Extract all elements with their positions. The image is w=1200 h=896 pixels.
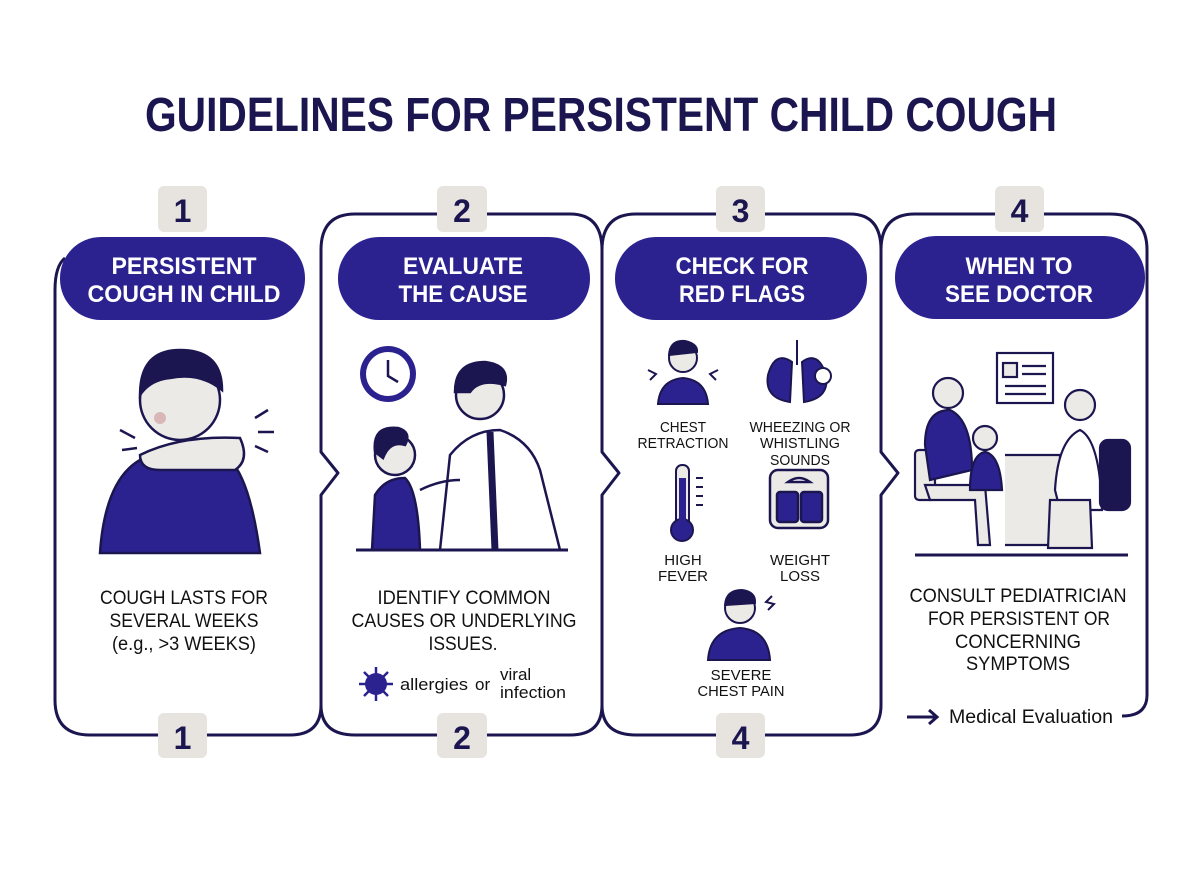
badge 1 bottom: 1: [174, 720, 191, 756]
badge 2 top: [437, 186, 487, 232]
text: chest retraction: CHEST: [660, 419, 706, 436]
text: wheezing: WHISTLING: [760, 435, 840, 452]
badge 3 top: 3: [732, 193, 749, 229]
panel: step 4: [895, 186, 1145, 728]
text: step 4 description: SYMPTOMS: [966, 654, 1070, 675]
icon: virus with causes: allergies: [400, 675, 468, 694]
text: step 2 description: CAUSES OR UNDERLYING: [352, 611, 576, 632]
header pill 1: COUGH IN CHILD: [88, 281, 280, 308]
badge 4 bottom: 4: [732, 720, 750, 756]
header pill 4: SEE DOCTOR: [945, 281, 1093, 308]
header pill 1: PERSISTENT: [112, 253, 257, 280]
header pill 3: [615, 237, 867, 320]
icon: virus with causes: or: [475, 675, 490, 694]
text: step 4 description: CONSULT PEDIATRICIAN: [910, 586, 1126, 607]
badge 4 top: 4: [1011, 193, 1029, 229]
text: step 1 description: COUGH LASTS FOR: [100, 588, 268, 609]
text: step 1 description: SEVERAL WEEKS: [110, 611, 258, 632]
text: severe chest pain: [698, 667, 784, 700]
panel outlines: [55, 214, 1147, 735]
text: step 4 description: FOR PERSISTENT OR: [928, 609, 1110, 630]
icon: virus with causes: infection: [500, 683, 566, 702]
text: weight loss: [770, 552, 830, 585]
icon: doctor examining child: [356, 362, 568, 550]
icon: chest retraction: [648, 341, 718, 404]
text: wheezing: SOUNDS: [770, 452, 830, 469]
badge 4 bottom: [716, 713, 765, 758]
text: chest retraction: RETRACTION: [638, 435, 728, 452]
header pill 4: [895, 236, 1145, 319]
header pill 2: THE CAUSE: [398, 281, 528, 308]
text: weight loss: WEIGHT: [770, 552, 830, 569]
icon: doctor consultation scene: [915, 353, 1130, 555]
text: step 4 description: CONCERNING: [955, 632, 1081, 653]
header pill 3: CHECK FOR: [676, 253, 808, 280]
title: GUIDELINES FOR PERSISTENT CHILD COUGH: [145, 89, 1057, 142]
icon: thermometer: [671, 465, 703, 541]
badge 2 bottom: [437, 713, 487, 758]
text: wheezing: WHEEZING OR: [750, 419, 851, 436]
badge 3 top: [716, 186, 765, 232]
icon: weight scale: [770, 470, 828, 528]
badge 1 bottom: [158, 713, 207, 758]
text: high fever: HIGH: [664, 552, 702, 569]
badge 2 bottom: 2: [453, 720, 471, 756]
icon: coughing child: [100, 350, 274, 553]
header pill 4: WHEN TO: [966, 253, 1072, 280]
badge 1 top: 1: [174, 193, 191, 229]
panel: step 3: [615, 186, 867, 758]
text: severe chest pain: CHEST PAIN: [698, 683, 784, 700]
panel: step 1: [60, 186, 305, 758]
text: step 4 description: [910, 586, 1126, 675]
text: step 2 description: IDENTIFY COMMON: [378, 588, 550, 609]
text: wheezing: [750, 419, 851, 469]
text: step 1 description: (e.g., >3 WEEKS): [112, 634, 256, 655]
icon: virus with causes: [359, 665, 566, 702]
header pill 3: RED FLAGS: [679, 281, 805, 308]
arrow: medical evaluation: Medical Evaluation: [949, 707, 1113, 728]
text: step 2 description: [352, 588, 576, 655]
icon: clock: [360, 346, 416, 402]
text: step 1 description: [100, 588, 268, 655]
badge 1 top: [158, 186, 207, 232]
badge 2 top: 2: [453, 193, 471, 229]
text: severe chest pain: SEVERE: [711, 667, 771, 684]
icon: virus with causes: viral: [500, 665, 531, 684]
text: high fever: FEVER: [658, 568, 708, 585]
text: weight loss: LOSS: [780, 568, 820, 585]
header pill 2: EVALUATE: [403, 253, 523, 280]
text: chest retraction: [638, 419, 728, 452]
header pill 1: [60, 237, 305, 320]
badge 4 top: [995, 186, 1044, 232]
text: step 2 description: ISSUES.: [428, 634, 498, 655]
text: high fever: [658, 552, 708, 585]
icon: chest pain: [708, 590, 774, 660]
panel: step 2: [338, 186, 590, 758]
icon: lungs and whistle: [767, 340, 831, 402]
header pill 2: [338, 237, 590, 320]
